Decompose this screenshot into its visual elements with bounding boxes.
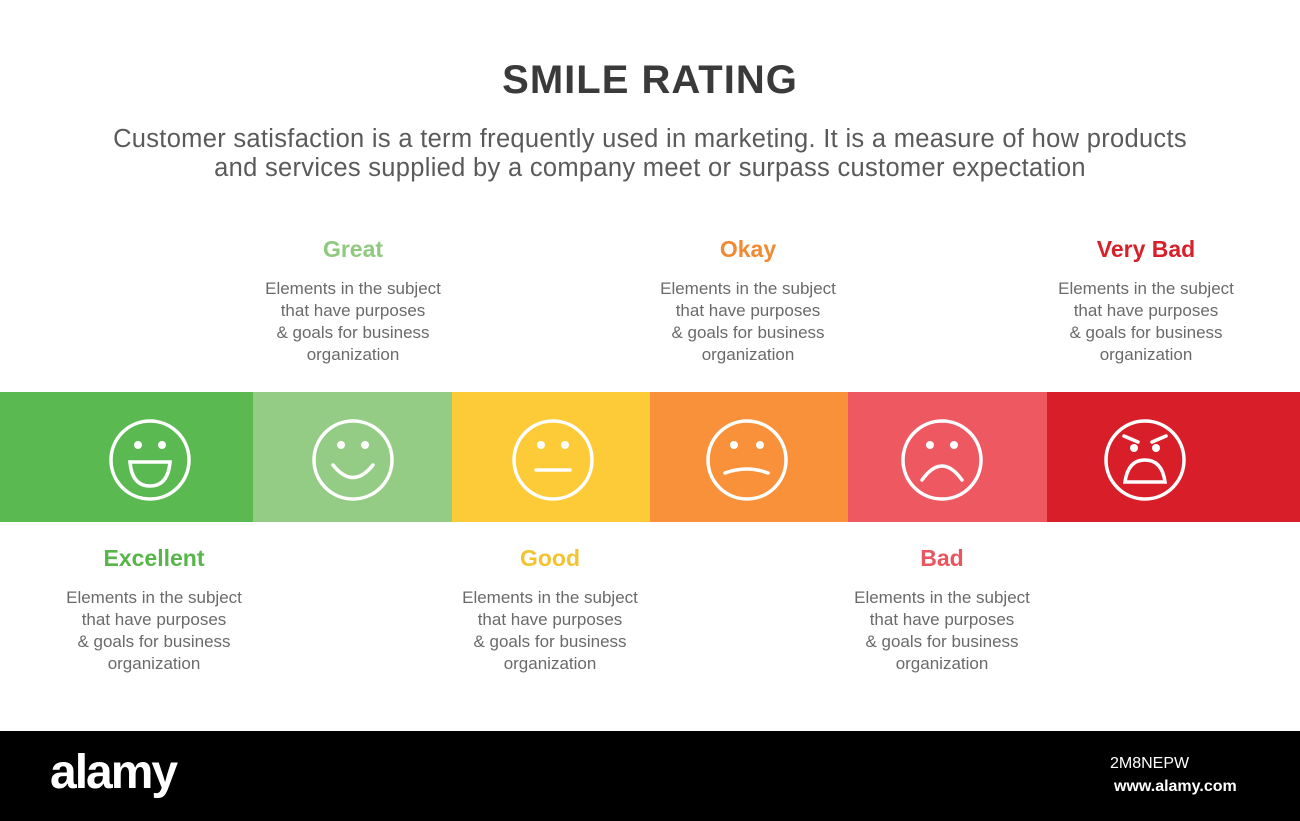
- label: Very Bad: Very Bad: [1097, 236, 1195, 262]
- label: Bad: & goals for business: [865, 632, 1019, 651]
- label: Great: [265, 236, 441, 364]
- icon: great face: [314, 421, 392, 499]
- label: Bad: [854, 545, 1030, 673]
- label: Great: organization: [307, 345, 399, 364]
- label: Good: organization: [504, 654, 596, 673]
- label: Good: & goals for business: [473, 632, 627, 651]
- logo: alamy: [50, 746, 176, 799]
- title: SMILE RATING: [502, 58, 798, 102]
- label: Good: Elements in the subject: [462, 588, 638, 607]
- label: Very Bad: Elements in the subject: [1058, 279, 1234, 298]
- label: Bad: Elements in the subject: [854, 588, 1030, 607]
- label: Excellent: organization: [108, 654, 200, 673]
- label: Okay: [660, 236, 836, 364]
- label: Great: that have purposes: [281, 301, 425, 320]
- label: Bad: that have purposes: [870, 610, 1014, 629]
- label: Very Bad: organization: [1100, 345, 1192, 364]
- label: Excellent: & goals for business: [77, 632, 231, 651]
- label: Bad: organization: [896, 654, 988, 673]
- icon: good face: [514, 421, 592, 499]
- label: Great: Great: [323, 236, 383, 262]
- label: Good: [462, 545, 638, 673]
- icon: very bad face: [1106, 421, 1184, 499]
- subtitle: [113, 125, 1187, 182]
- icon: okay face: [708, 421, 786, 499]
- footer bar: [0, 731, 1300, 821]
- label: Bad: Bad: [920, 545, 964, 571]
- icon: excellent face: [111, 421, 189, 499]
- label: Okay: & goals for business: [671, 323, 825, 342]
- label: Very Bad: & goals for business: [1069, 323, 1223, 342]
- rating band: [0, 392, 1300, 522]
- label: Great: & goals for business: [276, 323, 430, 342]
- icon: bad face: [903, 421, 981, 499]
- label: Excellent: that have purposes: [82, 610, 226, 629]
- subtitle: Customer satisfaction is a term frequently used in marketing. It is a measure of how products: [113, 125, 1187, 153]
- label: Excellent: Excellent: [104, 545, 204, 571]
- label: Very Bad: [1058, 236, 1234, 364]
- label: Good: Good: [520, 545, 580, 571]
- label: Excellent: [66, 545, 242, 673]
- label: Okay: that have purposes: [676, 301, 820, 320]
- subtitle: and services supplied by a company meet or surpass customer expectation: [214, 154, 1086, 182]
- label: Okay: Elements in the subject: [660, 279, 836, 298]
- label: Okay: organization: [702, 345, 794, 364]
- label: Excellent: Elements in the subject: [66, 588, 242, 607]
- url: www.alamy.com: [1114, 778, 1237, 795]
- label: Very Bad: that have purposes: [1074, 301, 1218, 320]
- label: Great: Elements in the subject: [265, 279, 441, 298]
- label: Good: that have purposes: [478, 610, 622, 629]
- label: Okay: Okay: [720, 236, 776, 262]
- image id: 2M8NEPW: [1110, 755, 1189, 772]
